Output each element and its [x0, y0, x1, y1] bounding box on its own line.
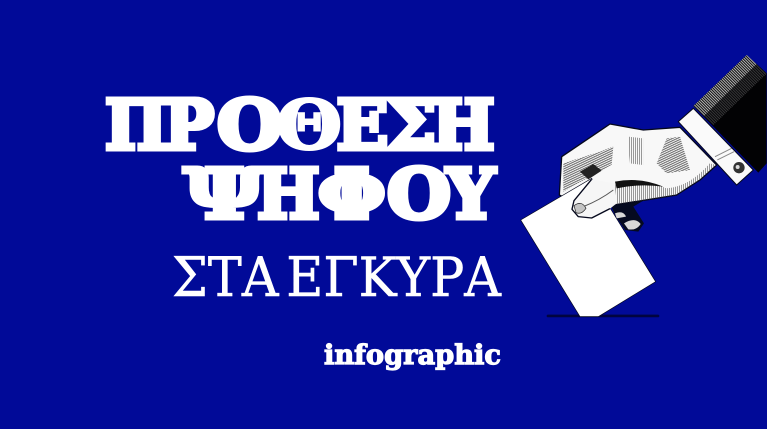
hand shading — [563, 147, 613, 192]
title line 1: Σ — [386, 86, 436, 166]
subtitle: ΣΤΑ ΕΓΚΥΡΑ — [172, 246, 502, 309]
lower fingers — [610, 197, 650, 232]
title line 2: Η — [256, 154, 319, 234]
title line 1 — [104, 86, 494, 166]
infographic label: infographic — [324, 340, 501, 371]
jacket sleeve — [693, 55, 767, 173]
title line 1: Ο — [216, 86, 282, 166]
illustration: hand casting ballot — [521, 55, 767, 317]
cuff button — [733, 162, 745, 173]
title line 2: Φ — [318, 154, 385, 234]
hand — [559, 124, 717, 217]
title line 2: Ο — [386, 154, 450, 234]
cuff stitching — [715, 148, 734, 160]
shirt cuff — [678, 108, 753, 185]
title line 1: Π — [104, 86, 167, 166]
sleeve ribbing — [693, 55, 767, 125]
title line 1: Ρ — [164, 86, 214, 166]
thumbnail — [574, 203, 586, 213]
title line 1: Η — [432, 86, 494, 166]
title line 1: Ε — [336, 86, 388, 166]
title line 2: Ψ — [184, 154, 264, 234]
ballot paper — [521, 178, 656, 317]
thumb — [572, 179, 617, 218]
title line 2: Υ — [446, 154, 495, 234]
title line 1: Θ — [276, 86, 342, 166]
title line 2 — [181, 154, 498, 234]
slot line — [547, 315, 659, 317]
